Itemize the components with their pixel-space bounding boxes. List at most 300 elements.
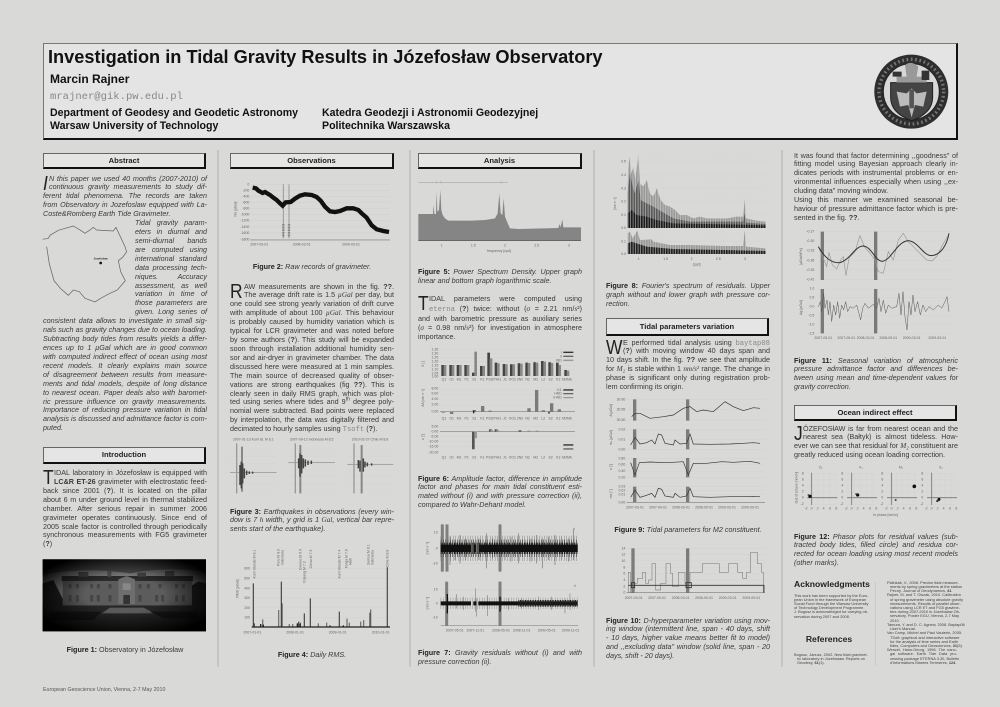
- figure 5 caption: linear and bottom graph logarithmic scale.: [418, 276, 551, 285]
- figure 2: raw gravimeter record: -200: [242, 188, 249, 192]
- figure 2: raw gravimeter record: 2008-03-01: [293, 243, 311, 247]
- abstract text: ferent tidal phenomena. The records are taken: [43, 191, 207, 200]
- drop cap J: J: [794, 423, 803, 445]
- figure 2: raw gravimeter record: -600: [242, 200, 249, 204]
- observations text: clearly seen in daily RMS graph, which was plot-: [230, 389, 394, 398]
- introduction text: about 6 m under ground level in thermal stabilized: [43, 495, 207, 504]
- figure 11 caption: pressure admittance factor and differences be-: [794, 364, 958, 373]
- figure 12: phasor plots: [795, 465, 957, 666]
- admittance text: [794, 150, 958, 222]
- figure 7: gravity residuals: 2007-05-01: [446, 628, 464, 632]
- figure 12: phasor plots: 2: [897, 506, 899, 510]
- figure 7: gravity residuals: 10: [434, 587, 438, 591]
- figure 10: D-hyperparameter variation: 12: [621, 553, 625, 557]
- figure 12: phasor plots: 4: [943, 506, 945, 510]
- acknowledgments text: pean Union in the framework of European: [794, 597, 866, 602]
- abstract text: continuous gravity measurements to study dif-: [49, 182, 207, 191]
- figure 11: seasonal admittance variation: 2009-09-01: [928, 336, 946, 340]
- figure 10: D-hyperparameter variation: 2007-09-01: [648, 596, 666, 600]
- figure 6: amplitude, difference and phase bars: M1: [457, 416, 461, 420]
- figure 6: amplitude, difference and phase bars: 1.30: [432, 351, 438, 355]
- figure 11 caption: [794, 356, 958, 391]
- ocean text: ever we can see that residual for M₂ constituent are: [794, 441, 958, 450]
- figure 2: raw gravimeter record: -800: [242, 207, 249, 211]
- abstract text: ments and tidal models, despite of long distance: [43, 379, 207, 388]
- figure 6 caption: factor and phases for main tidal constituent esti-: [418, 482, 582, 491]
- analysis text: and with barometric pressure as auxiliary series: [418, 314, 582, 322]
- figure 4: daily RMS chart: 500: [244, 576, 250, 580]
- figure 5: power spectrum density: 3: [568, 244, 570, 248]
- section heading: tidal parameters variation: Tidal parameters variation: [640, 322, 734, 331]
- section heading: observations: [230, 153, 394, 169]
- analysis text: eterna (?) twice: without (σ = 2.21 nm/s²): [429, 304, 582, 314]
- abstract text: Coste&Romberg Earth Tide Gravimeter.: [43, 209, 170, 218]
- references text, right: for the analysis of time series and Earth: [890, 639, 958, 644]
- figure 9 caption: Figure 9: Tidal parameters for M2 constituent.: [614, 525, 762, 534]
- references text, left: [794, 652, 868, 665]
- abstract text: those parameters are: [135, 298, 207, 307]
- figure 6: amplitude, difference and phase bars: κ [°]: [421, 434, 425, 440]
- figure 6: amplitude, difference and phase bars: 1.10: [432, 367, 438, 371]
- figure 12: phasor plots: 2: [937, 506, 939, 510]
- figure 9: M2 tidal parameters: 30.50: [617, 418, 625, 422]
- figure 11: seasonal admittance variation: -0.27: [806, 230, 814, 234]
- figure 9: M2 tidal parameters: mₐ [µGal]: [609, 430, 613, 445]
- section heading: observations: Observations: [287, 156, 336, 165]
- drop cap I: I: [43, 173, 48, 195]
- figure 6: amplitude, difference and phase bars: M2: [533, 416, 538, 420]
- figure 6: amplitude, difference and phase bars: δA [nm s⁻²]: [421, 389, 425, 407]
- references text, right: of spring gravimeter using absolute gravity: [890, 597, 963, 602]
- affiliation english: Department of Geodesy and Geodetic Astronomy: [50, 107, 298, 119]
- figure 6: amplitude, difference and phase bars: P1: [465, 416, 469, 420]
- figure 12 caption: rected for ocean loading using most recent models: [794, 549, 958, 558]
- figure 2: raw gravimeter record: -1600: [240, 231, 249, 235]
- references text, right: cessing package ETERNA 3.30, Bulletin: [890, 656, 959, 661]
- figure 10: D-hyperparameter variation: 4: [623, 578, 625, 582]
- figure 6: amplitude, difference and phase bars: K1: [480, 455, 485, 459]
- figure 12: phasor plots: 8: [921, 471, 923, 475]
- figure 2: raw gravimeter record: -400: [242, 194, 249, 198]
- figure 8: Fourier spectrum of residuals: 0.3: [621, 186, 626, 190]
- figure 8: Fourier spectrum of residuals: 0.1: [621, 239, 626, 243]
- figure 6: amplitude, difference and phase bars: N2: [525, 455, 530, 459]
- figure 10: D-hyperparameter variation: 2009-03-01: [719, 596, 737, 600]
- figure 11: seasonal admittance variation: 2007-09-01: [837, 336, 855, 340]
- acknowledgments heading: Acknowledgments: [794, 579, 870, 589]
- figure 12: phasor plots: 4: [802, 484, 804, 488]
- abstract text: are computed using: [135, 245, 207, 254]
- figure 5: power spectrum density: 1.5: [471, 244, 476, 248]
- drop cap T: T: [43, 467, 54, 489]
- references text, left: Bogusz, Janusz, 2002. New tidal gravimet-: [794, 652, 868, 656]
- figure 6 caption: [418, 474, 582, 509]
- figure 2 caption: Figure 2: Raw records of gravimeter.: [253, 262, 371, 271]
- references text, left: Geodesy, 61(1).: [797, 660, 825, 665]
- figure 7: gravity residuals: 2007-11-01: [467, 628, 484, 632]
- figure 6: amplitude, difference and phase bars: OO1: [509, 455, 516, 459]
- ocean text: ÓZEFOSłAW is far from nearest ocean and the: [803, 424, 958, 432]
- figure 7: gravity residuals: -10: [433, 561, 438, 565]
- figure 2: raw gravimeter record: 2009-03-01: [342, 243, 360, 247]
- references text, right: Tamura, Y. and D. C. Agnew, 2008. Baytap08: [887, 622, 965, 627]
- figure 12: phasor plots: -2: [804, 506, 808, 510]
- drop cap R: R: [230, 281, 243, 303]
- admittance text: cluding data" moving window.: [794, 186, 888, 195]
- icon: map of Poland: Józefosław: [94, 257, 109, 261]
- references heading: References: [806, 634, 852, 644]
- figure 6: amplitude, difference and phase bars: J1: [503, 416, 507, 420]
- figure 8: Fourier spectrum of residuals: 2: [691, 257, 693, 261]
- figure 7: gravity residuals: 2009-05-01: [538, 628, 556, 632]
- figure 4 caption: Figure 4: Daily RMS.: [278, 650, 346, 658]
- abstract text: to nearest ocean. Paper deals also with baromet-: [43, 388, 207, 397]
- figure 6: amplitude, difference and phase bars: Q1: [442, 455, 446, 459]
- figure 9: M2 tidal parameters: 0.02: [619, 489, 625, 493]
- acknowledgments text: [794, 592, 868, 619]
- figure 4: daily RMS chart: 400: [244, 586, 250, 590]
- observations text: ted using series where tides and 9th degree poly-: [230, 397, 394, 406]
- figure 9: M2 tidal parameters: [609, 397, 765, 510]
- references text, right: Van Camp, Michel and Paul Vauterin, 2005.: [887, 630, 962, 635]
- figure 4: daily RMS chart: 2007-01-01: [243, 631, 261, 635]
- figure 12: phasor plots: 8: [802, 471, 804, 475]
- figure 9: M2 tidal parameters: 2007-09-01: [649, 506, 667, 510]
- figure 6: amplitude, difference and phase bars: K2: [556, 455, 561, 459]
- figure 4: daily RMS chart: Peru M 8.0: [277, 549, 281, 566]
- figure 7: gravity residuals: ii: [574, 584, 576, 588]
- admittance text: It was found that factor determining ,,goodness" of: [794, 150, 958, 160]
- figure 6: amplitude, difference and phase bars: K1: [480, 416, 485, 420]
- abstract text: eters in diurnal and: [135, 227, 207, 236]
- figure 8 caption: Figure 8: Fourier's spectrum of residuals. Upper: [606, 281, 770, 290]
- ocean text: greatly reduced using ocean loading correction.: [794, 450, 945, 459]
- introduction text: chamber. After serious repair in summer 2006: [43, 504, 207, 513]
- figure 6: amplitude, difference and phase bars: PSI1PHI1: [486, 378, 501, 382]
- figure 10: D-hyperparameter variation: 2008-03-01: [672, 596, 690, 600]
- references text, right: ters during 2007-2010 in Józefosław Ob-: [890, 609, 960, 614]
- figure 11: seasonal admittance variation: -1.0: [808, 322, 814, 326]
- figure 8: Fourier spectrum of residuals: 3: [744, 257, 746, 261]
- introduction text: gravimeter operates continuously. Since end of: [43, 513, 207, 522]
- tidal parameters text: phase is significant only during registration prob-: [606, 373, 770, 382]
- figure 12 caption: (other marks).: [794, 558, 839, 567]
- figure 4: daily RMS chart: 2009-01-01: [329, 631, 347, 635]
- figure 6: amplitude, difference and phase bars: S1: [472, 416, 477, 420]
- figure 8: Fourier spectrum of residuals: 0.4: [621, 173, 626, 177]
- figure 6: amplitude, difference and phase bars: PSI1PHI1: [486, 455, 501, 459]
- observations text: is probably caused by humidity variation which is: [230, 317, 394, 326]
- figure 3: earthquake waveforms: 2007-09-12 Indonesia M 8.5: [290, 438, 334, 442]
- introduction text: LC&R ET-26 gravimeter with electrostatic feed-: [54, 477, 207, 486]
- figure 12: phasor plots: 6: [841, 477, 843, 481]
- figure 9: M2 tidal parameters: 2009-09-01: [741, 506, 759, 510]
- tidal parameters text: E performed tidal analysis using baytap08: [623, 338, 770, 348]
- figure 10: D-hyperparameter variation: 10: [621, 559, 625, 563]
- figure 12: phasor plots: In phase [nm/s²]: [873, 513, 898, 517]
- email: mrajner@gik.pw.edu.pl: [50, 91, 183, 103]
- abstract text: niques. Accuracy: [135, 272, 207, 281]
- figure 5 caption: [418, 267, 582, 285]
- acknowledgments text: of Technology Development Programme.: [794, 605, 864, 610]
- figure 6: amplitude, difference and phase bars: S2: [549, 378, 553, 382]
- admittance text: haviour of pressure admittance factor which is pre-: [794, 204, 958, 213]
- figure 6: amplitude, difference and phase bars: M2: [533, 455, 538, 459]
- figure 4: daily RMS chart: 300: [244, 596, 250, 600]
- figure 7: gravity residuals: [nm s⁻²]: [425, 542, 429, 554]
- section heading: analysis: [418, 153, 582, 169]
- figure 3: earthquake waveforms: 2007-01-13 Kuril Isl. M 8.1: [233, 438, 274, 442]
- references text, right: Rajner, M. and T. Olszak, 2010. Calibration: [887, 592, 961, 597]
- figure 5: power spectrum density: [418, 181, 581, 253]
- references text, right: Pecný, Journal of Geodynamics, 41.: [890, 588, 953, 593]
- figure 12: phasor plots: K₁: [859, 465, 864, 469]
- admittance text: dicates periods with instrumental problems or en-: [794, 168, 958, 177]
- figure 11: seasonal admittance variation: 2009-03-01: [903, 336, 921, 340]
- introduction text: [43, 468, 207, 548]
- figure 6: amplitude, difference and phase bars: S1: [472, 455, 477, 459]
- figure 9: M2 tidal parameters: 0.00: [619, 447, 625, 451]
- figure 2: raw gravimeter record: -1400: [240, 225, 249, 229]
- figure 9: M2 tidal parameters: 2008-03-01: [672, 506, 690, 510]
- figure 6: amplitude, difference and phase bars: i: [561, 350, 562, 354]
- figure 11: seasonal admittance variation: [µGal/hPa]: [799, 248, 803, 265]
- figure 7 caption: Figure 7: Gravity residuals without (i) and with: [418, 648, 582, 657]
- abstract text: from Observatory in Jozefoslaw equipped with La-: [43, 200, 207, 209]
- figure 5 caption: Figure 5: Power Spectrum Density. Upper graph: [418, 267, 582, 276]
- abstract text: nals such as gravity changes due to ocean loading.: [43, 325, 207, 334]
- figure 6 caption: compared to Wahr-Dehant model.: [418, 500, 526, 509]
- figure 6: amplitude, difference and phase bars: K1: [480, 378, 485, 382]
- figure 6: amplitude, difference and phase bars: S2: [549, 416, 553, 420]
- figure 9: M2 tidal parameters: 0.00: [619, 500, 625, 504]
- admittance text: sented in the fig. ??.: [794, 213, 860, 222]
- figure 6: amplitude, difference and phase bars: ii-WD: [553, 396, 562, 400]
- analysis text: IDAL parameters were computed using: [429, 294, 582, 302]
- figure 6: amplitude, difference and phase bars: 0.00: [432, 430, 438, 434]
- figure 6: amplitude, difference and phase bars: M1: [457, 378, 461, 382]
- figure 12: phasor plots: 0: [841, 496, 843, 500]
- figure 6: amplitude, difference and phase bars: -15.00: [428, 445, 438, 449]
- figure 7: gravity residuals: 2009-11-01: [562, 628, 579, 632]
- figure 6: amplitude, difference and phase bars: K2: [556, 378, 561, 382]
- figure 6: amplitude, difference and phase bars: OO1: [509, 378, 516, 382]
- figure 6: amplitude, difference and phase bars: -10.00: [428, 440, 438, 444]
- figure 6: amplitude, difference and phase bars: Q1: [442, 378, 446, 382]
- figure 10: D-hyperparameter variation: [621, 546, 765, 600]
- abstract text: analysis is discussed and admittance factor is com-: [43, 414, 207, 423]
- analysis text: (σ = 0.98 nm/s²) for investigation in atmosphere: [418, 322, 582, 332]
- figure 6: amplitude, difference and phase bars: L2: [541, 378, 545, 382]
- references text, right: [887, 580, 965, 665]
- drop cap T: T: [418, 293, 429, 315]
- figure 10 caption: ing window (intermittent line, span - 40 days, shift: [606, 624, 770, 633]
- figure 12: phasor plots: 0: [931, 506, 933, 510]
- figure 12: phasor plots: 0: [881, 496, 883, 500]
- figure 3 caption: sents start of the earthquake).: [230, 524, 326, 533]
- figure 8: Fourier spectrum of residuals: 0.5: [621, 160, 626, 164]
- figure 11: seasonal admittance variation: -1.5: [808, 331, 814, 335]
- figure 6: amplitude, difference and phase bars: J1: [503, 455, 507, 459]
- figure 10: D-hyperparameter variation: 8: [623, 565, 625, 569]
- figure 6: amplitude, difference and phase bars: O1: [449, 416, 454, 420]
- figure 4: daily RMS chart: Tonga M 7.6: [345, 549, 349, 568]
- figure 8: Fourier spectrum of residuals: 1.5: [663, 257, 668, 261]
- introduction text: synchronous measurements with FG5 gravimeter: [43, 530, 207, 539]
- figure 10: D-hyperparameter variation: 2009-09-01: [742, 596, 760, 600]
- figure 8: Fourier spectrum of residuals: [nm s⁻²]: [613, 197, 617, 210]
- figure 12: phasor plots: 2: [802, 490, 804, 494]
- figure 2: raw gravimeter record: [233, 182, 390, 247]
- figure 11 caption: Figure 11: Seasonal variation of atmospheric: [794, 356, 958, 364]
- title: Investigation in Tidal Gravity Results in Józefosław Observatory: [48, 47, 603, 67]
- abstract text: ric pressure influence on gravity measurements.: [43, 397, 207, 406]
- figure 6: amplitude, difference and phase bars: M3M6: [562, 455, 572, 459]
- abstract text: puted.: [43, 423, 63, 432]
- observations text: by some authors (?). This study will be expanded: [230, 335, 394, 344]
- figure 7: gravity residuals: 2008-11-01: [513, 628, 530, 632]
- figure 3: earthquake waveforms: [230, 438, 393, 493]
- figure 12: phasor plots: 4: [863, 506, 865, 510]
- references text, right: ments by spring gravimeters at the station: [890, 584, 962, 589]
- figure 6: amplitude, difference and phase bars: O1: [449, 378, 454, 382]
- figure 12: phasor plots: S₂: [939, 465, 943, 469]
- observations text: typical for LCR gravimeter and was noted before: [230, 326, 394, 335]
- acknowledgments text: This work has been supported by the Euro-: [794, 592, 868, 598]
- introduction text: IDAL laboratory in Józefosław is equipped with: [54, 468, 207, 477]
- figure 12: phasor plots: 8: [875, 506, 877, 510]
- figure 4: daily RMS chart: [235, 544, 390, 635]
- ocean text: nearest sea (Bałtyk) is almost tideless. How-: [803, 432, 958, 441]
- figure 11: seasonal admittance variation: -0.5: [808, 313, 814, 317]
- abstract text: international standard: [135, 254, 207, 263]
- admittance text: fitting model using Bayesian approach clearly in-: [794, 159, 958, 168]
- figure 6: amplitude, difference and phase bars: 2.00: [432, 402, 438, 406]
- figure 10 caption: and ,,excluding data" window (solid line, span - 20: [606, 642, 770, 651]
- figure 12: phasor plots: -2: [884, 506, 888, 510]
- section heading: ocean indirect effect: Ocean indirect effect: [837, 408, 913, 417]
- figure 12: phasor plots: 4: [823, 506, 825, 510]
- abstract text: [42, 174, 208, 432]
- introduction text: (?): [43, 539, 52, 548]
- figure 3 caption: [230, 506, 394, 533]
- figure 6: amplitude, difference and phase bars: N2: [525, 416, 530, 420]
- section heading: ocean indirect effect: [794, 405, 957, 421]
- figure 4: daily RMS chart: Greece M 6.9: [298, 549, 302, 570]
- figure 12: phasor plots: 4: [841, 484, 843, 488]
- figure 6: amplitude, difference and phase bars: 8.00: [432, 386, 438, 390]
- figure 6: amplitude, difference and phase bars: 2N2: [517, 455, 523, 459]
- abstract text: Tidal gravity param-: [135, 218, 207, 227]
- figure 6: amplitude, difference and phase bars: 1.05: [432, 371, 438, 375]
- figure 8: Fourier spectrum of residuals: [613, 154, 766, 267]
- figure 11 caption: gravity correction.: [794, 382, 851, 391]
- figure 9: M2 tidal parameters: κ [°]: [609, 464, 613, 470]
- abstract text: assessment, as well: [135, 281, 207, 290]
- references text, right: gal software: Earth Tide Data pro-: [890, 651, 957, 656]
- figure 8: Fourier spectrum of residuals: 0.0: [621, 252, 626, 256]
- figure 6: amplitude, difference and phase bars: P1: [465, 455, 469, 459]
- figure 11: seasonal admittance variation: 2008-03-01: [857, 336, 875, 340]
- figure 6: amplitude, difference and phase bars: 4.00: [432, 397, 438, 401]
- figure 6: amplitude, difference and phase bars: P1: [465, 378, 469, 382]
- figure 12: phasor plots: 4: [881, 484, 883, 488]
- observations text: AW measurements are shown in the fig. ??.: [244, 282, 394, 290]
- figure 12: phasor plots: -2: [844, 506, 848, 510]
- figure 12: phasor plots: 8: [955, 506, 957, 510]
- observations text: The main source of decreased quality of obser-: [230, 371, 394, 380]
- figure 5: power spectrum density: 1: [441, 244, 443, 248]
- figure 7 caption: [418, 648, 582, 666]
- analysis text: [418, 294, 582, 340]
- figure 8: Fourier spectrum of residuals: 0.1: [621, 213, 626, 217]
- figure 12: phasor plots: 4: [903, 506, 905, 510]
- figure 9: M2 tidal parameters: 2009-03-01: [718, 506, 736, 510]
- figure 3: earthquake waveforms: 2010-02-27 Chile M 8.8: [352, 438, 388, 442]
- admittance text: vironmental influences especially when using ,,ex-: [794, 177, 958, 186]
- figure 11: seasonal admittance variation: 1.0: [809, 287, 814, 291]
- figure 11: seasonal admittance variation: -0.30: [806, 239, 814, 243]
- figure 12: phasor plots: 8: [915, 506, 917, 510]
- section heading: abstract: [43, 153, 206, 169]
- figure 1: observatory photo: [43, 559, 206, 631]
- figure 6: amplitude, difference and phase bars: δ [ ]: [421, 361, 425, 367]
- figure 6: amplitude, difference and phase bars: OO1: [509, 416, 516, 420]
- figure 7: gravity residuals: [425, 524, 579, 632]
- observations text: nomial were subtracted. Bad points were replaced: [230, 406, 394, 415]
- acknowledgments text: servation during 2007 and 2008.: [794, 614, 850, 619]
- section heading: introduction: Introduction: [102, 450, 146, 459]
- figure 11: seasonal admittance variation: 0.5: [809, 296, 814, 300]
- tidal parameters text: (?) with moving window 40 days span and: [623, 346, 770, 355]
- figure 2: raw gravimeter record: -1800: [240, 237, 249, 241]
- author: Marcin Rajner: [50, 72, 129, 86]
- acknowledgments text: Social Fund through the Warsaw University: [794, 601, 868, 606]
- figure 12 caption: tracted body tides, filled circle) and residua cor-: [794, 540, 958, 549]
- abstract text: consistent data allows to investigate in small sig-: [43, 316, 207, 325]
- affiliation polish: Katedra Geodezji i Astronomii Geodezyjnej: [322, 107, 538, 119]
- section heading: introduction: [43, 447, 206, 464]
- figure 12: phasor plots: -2: [801, 502, 804, 506]
- references text, right: measurements. Results of parallel obser-: [890, 601, 961, 606]
- figure 12: phasor plots: 6: [802, 477, 804, 481]
- figure 9: M2 tidal parameters: 30.55: [617, 407, 625, 411]
- figure 6: amplitude, difference and phase bars: 1.35: [432, 347, 438, 351]
- figure 6: amplitude, difference and phase bars: M3M6: [562, 378, 572, 382]
- figure 11: seasonal admittance variation: 2007-03-01: [814, 336, 832, 340]
- figure 9: M2 tidal parameters: 0.01: [619, 493, 625, 497]
- affiliation polish: [322, 107, 538, 132]
- figure 10 caption: [606, 616, 770, 660]
- figure 6: amplitude, difference and phase bars: M3M6: [562, 416, 572, 420]
- tidal parameters text: 10 days shift. In the fig. ?? we see that amplitude: [606, 355, 770, 364]
- header panel: [43, 43, 958, 140]
- figure 6: amplitude, difference and phase bars: -5.00: [430, 435, 438, 439]
- figure 7 caption: pressure correction (ii).: [418, 657, 492, 666]
- figure 10: D-hyperparameter variation: 2008-09-01: [695, 596, 713, 600]
- figure 9: M2 tidal parameters: 2008-09-01: [695, 506, 713, 510]
- figure 12: phasor plots: 6: [921, 477, 923, 481]
- figure 9: M2 tidal parameters: 0.01: [619, 437, 625, 441]
- figure 12: phasor plots: 6: [949, 506, 951, 510]
- figure 6: amplitude, difference and phase bars: 1.00: [432, 374, 438, 378]
- figure 4: daily RMS chart: 2010-01-01: [372, 631, 390, 635]
- figure 12: phasor plots: 0: [851, 506, 853, 510]
- figure 6: amplitude, difference and phase bars: M2: [533, 378, 538, 382]
- observations text: soon through installation additional humidity sen-: [230, 344, 394, 353]
- figure 7: gravity residuals: 10: [434, 531, 438, 535]
- figure 4: daily RMS chart: Indonesia: [281, 550, 285, 565]
